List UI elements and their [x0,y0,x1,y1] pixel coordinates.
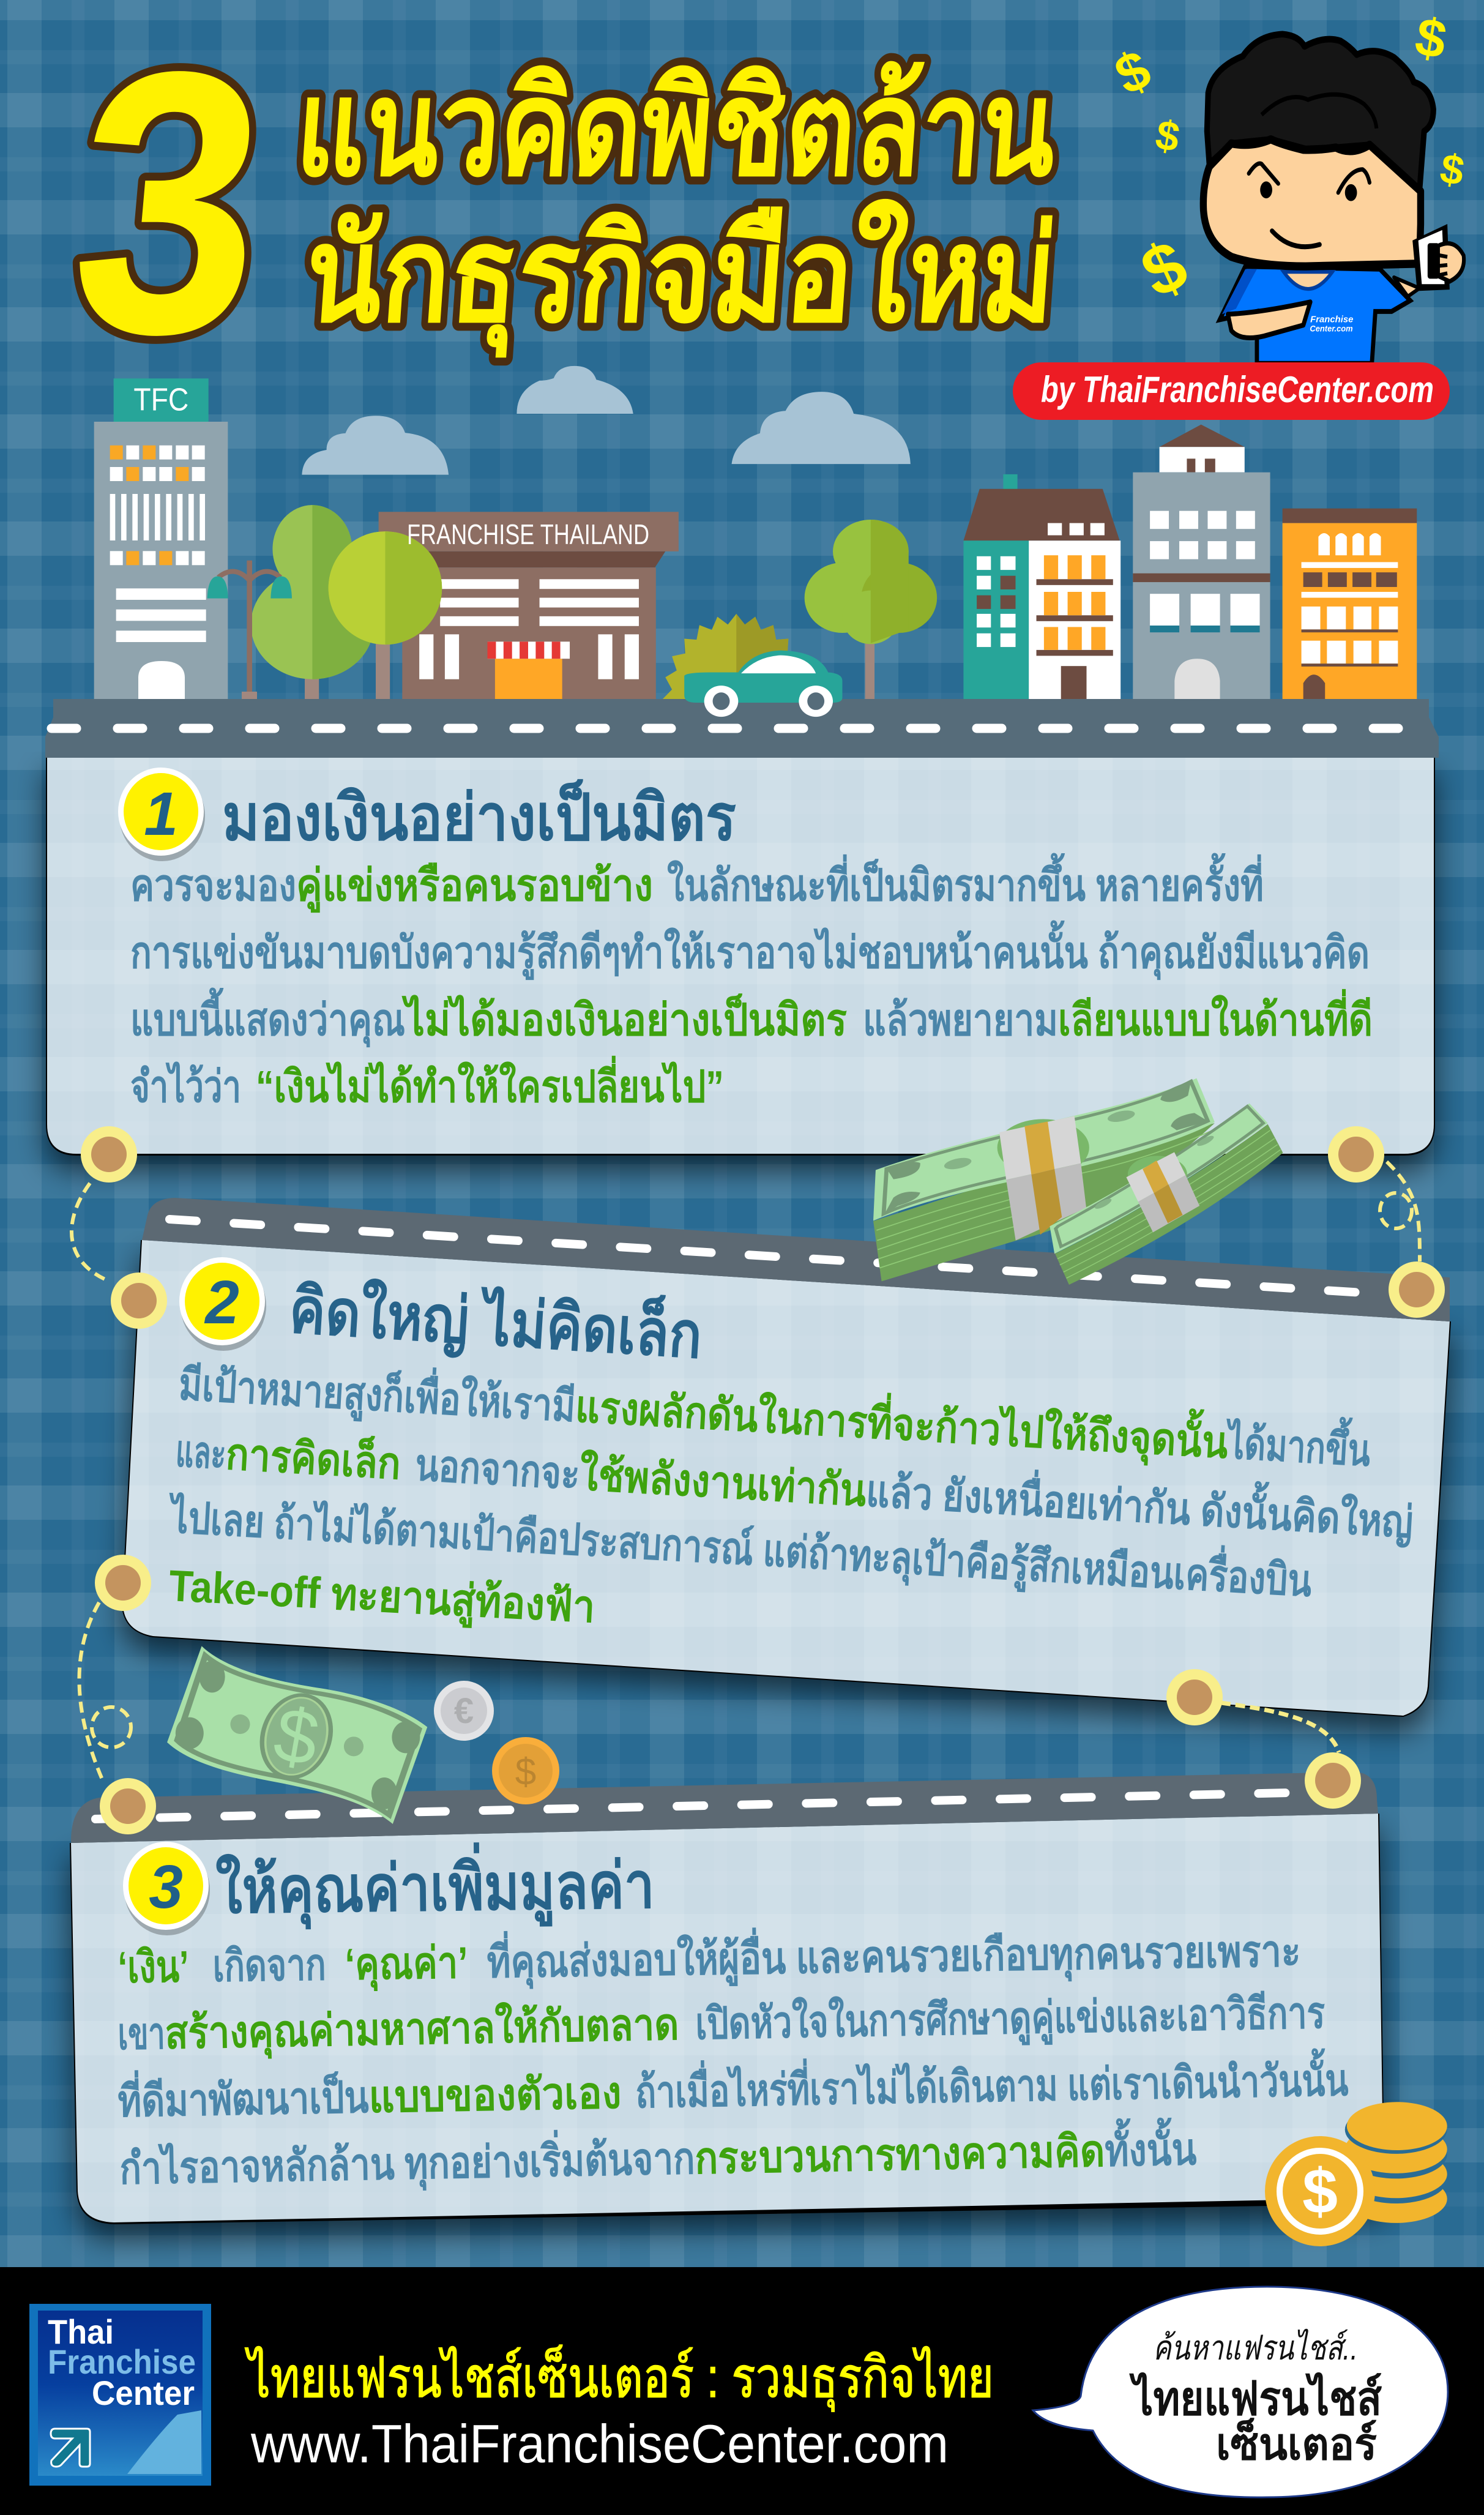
road 1 [45,699,1439,758]
mascot shirt logo: Center.com [1310,324,1353,334]
dashed connector 3 [79,1602,131,1784]
silver coin [434,1681,494,1741]
mascot face [1203,140,1420,266]
connector pins [81,1126,1445,1834]
body text 3: ‘เงิน’ [117,1942,189,1992]
title: แนวคิดพิชิตล้าน [292,54,1061,203]
body text 3: สร้างคุณค่ามหาศาลให้กับตลาด [165,1998,679,2061]
townhouse building [963,474,1120,699]
right tree [805,520,937,699]
big dollar coin: $ [1302,2156,1338,2227]
body text 2 [166,1351,1415,1635]
body text 3: ที่ดีมาพัฒนาเป็น [117,2066,369,2126]
body text 3: เขา [117,2009,165,2059]
street lamp [207,561,292,699]
mascot shirt [1220,266,1410,364]
heading 2: คิดใหญ่ ไม่คิดเล็ก [287,1271,704,1373]
dollar signs: $ [1437,145,1467,195]
mascot pointing arm [1228,302,1310,338]
body text 1: คู่แข่งหรือคนรอบข้าง [296,861,653,913]
money stack large [873,1078,1215,1281]
mascot eyes [1249,163,1370,247]
orange coin: $ [515,1751,536,1793]
panel 3 [70,1772,1385,2224]
body text 3 [117,1919,1349,2197]
body text 2: มีเป้าหมายสูงก็เพื่อให้เรามี [177,1353,577,1434]
footer yellow tagline: ไทยแฟรนไชส์เซ็นเตอร์ : รวมธุรกิจไทย [244,2344,994,2412]
speech bubble: เซ็นเตอร์ [1216,2418,1377,2469]
dollar signs [1106,6,1467,313]
number badge 2: 2 [204,1268,239,1337]
body text 3: เกิดจาก [212,1940,326,1991]
coin stack [1345,2102,1447,2223]
footer logo: Center [92,2374,195,2412]
number badge 3: 3 [149,1853,183,1921]
title number 3: 3 [59,0,279,411]
body text 2: Take-off ทะยานสู่ท้องฟ้า [168,1561,596,1635]
heading 3: ให้คุณค่าเพิ่มมูลค่า [215,1840,655,1931]
dashed connector 2 [1380,1162,1420,1261]
dashed connector 1 [72,1183,109,1281]
footer logo: Franchise [48,2342,196,2381]
mascot shirt logo: Franchise [1310,314,1354,324]
speech bubble: ไทยแฟรนไชส์ [1129,2372,1382,2425]
car [684,651,842,717]
body text 2: ได้มากขึ้น [1223,1410,1372,1476]
body text 2: และ [174,1427,228,1479]
road 2 [142,1198,1450,1321]
panel 2 [122,1198,1451,1717]
city scene [251,366,937,701]
body text 2: แรงผลักดันในการที่จะก้าวไปให้ถึงจุดนั้น [574,1373,1230,1471]
body text 1: ควรจะมอง [130,861,296,910]
body text 1: ในลักษณะที่เป็นมิตรมากขึ้น หลายครั้งที่ [667,853,1264,910]
speech bubble [1033,2287,1448,2497]
dashed connector 4 [1221,1703,1339,1752]
bush behind car [663,614,810,699]
body text 1: “เงินไม่ได้ทำให้ใครเปลี่ยนไป” [256,1055,724,1112]
title: นักธุรกิจมือใหม่ [300,198,1061,358]
road 3 [71,1772,1378,1843]
mascot character [1203,34,1464,364]
body text 3: ‘คุณค่า’ [345,1938,468,1992]
franchise shop [379,512,679,699]
body text 1: แล้วพยายาม [863,996,1058,1045]
dollar signs: $ [1411,6,1451,70]
mascot hair [1207,34,1433,191]
number badge 1: 1 [144,780,178,848]
number badge 2 [179,1257,266,1351]
dollar signs: $ [1130,225,1199,313]
body text 3: ที่คุณส่งมอบให้ผู้อื่น และคนรวยเกือบทุกคนรวยเพราะ [487,1919,1301,1990]
orange coin [492,1737,559,1804]
body text 3: กำไรอาจหลักล้าน ทุกอย่างเริ่มต้นจาก [119,2127,695,2197]
footer logo: Thai [48,2312,114,2351]
banknote dollar symbol: $ [268,1691,325,1782]
mascot hand with phone [1394,224,1464,296]
by-line badge [1013,362,1450,420]
tree behind tower [251,505,374,700]
title [292,54,1061,358]
number badge 3 [123,1842,210,1935]
city scene buildings [329,425,1417,699]
body text 2: การคิดเล็ก [225,1427,402,1489]
panel 1 [45,699,1439,1156]
body text 2: นอกจากจะ [414,1441,581,1499]
grey office building [1133,425,1270,699]
footer logo [29,2304,211,2486]
body text 3: ทั้งนั้น [1104,2117,1197,2176]
flying banknote [167,1646,427,1824]
TFC tower: TFC [133,382,188,417]
body text 3: แบบของตัวเอง [368,2069,622,2122]
second tree [329,531,442,701]
body text 2: ใช้พลังงานเท่ากัน [578,1448,868,1515]
body text 1: จำไว้ว่า [130,1061,241,1112]
body text 1: เลียนแบบในด้านที่ดี [1058,988,1373,1045]
dollar signs: $ [1152,111,1183,161]
silver coin: € [454,1691,474,1731]
body text 1: แบบนี้แสดงว่าคุณ [130,987,405,1048]
TFC tower [94,378,228,699]
speech bubble: ค้นหาแฟรนไชส์.. [1153,2328,1358,2367]
footer website: www.ThaiFranchiseCenter.com [250,2413,949,2474]
orange building [1283,509,1417,699]
body text 1 [130,853,1373,1112]
footer bar [0,2267,1484,2515]
body text 1: ไม่ได้มองเงินอย่างเป็นมิตร [401,993,847,1045]
body text 3: กระบวนการทางความคิด [695,2127,1105,2183]
big dollar coin [1265,2136,1375,2246]
clouds [302,366,911,475]
number badge 1 [118,768,205,861]
money stack small [1050,1104,1283,1285]
dollar signs: $ [1106,39,1160,107]
heading 1: มองเงินอย่างเป็นมิตร [222,779,736,854]
green tree overlap [329,531,442,645]
mascot shirt logo [1310,314,1354,334]
shop sign text: FRANCHISE THAILAND [407,518,649,550]
